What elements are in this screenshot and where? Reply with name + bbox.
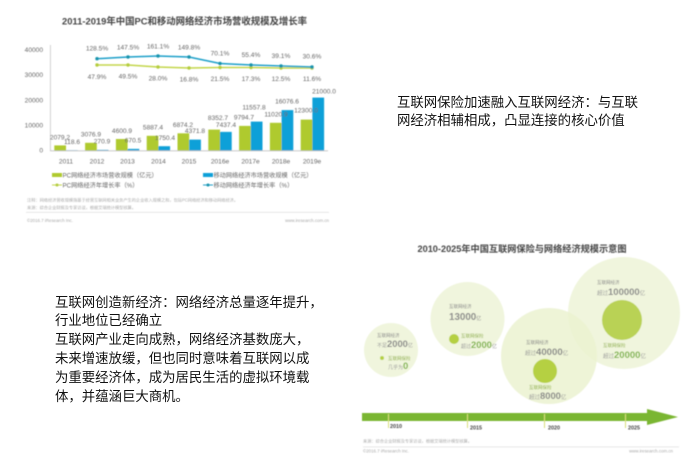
bar value labels: 1750.4 (155, 135, 175, 142)
text block: insurance and internet economy: 互联网保险加速融入互联网经济：与互联 (397, 95, 638, 110)
bubble: 2020: 互联网保险 (529, 384, 552, 391)
bubble: 2010: 不足2000亿 (377, 338, 413, 349)
text block: internet creates new economy: 行业地位已经确立 (55, 313, 162, 328)
x axis years: 2018e (272, 158, 290, 166)
timeline arrow: 2020 (548, 426, 560, 432)
x axis years: 2019e (303, 158, 321, 166)
x axis years (59, 158, 321, 166)
x axis years: 2017e (241, 158, 260, 166)
bar value labels: 11557.8 (242, 104, 266, 112)
growth rate labels: PC: 16.8% (180, 76, 198, 84)
x axis years: 2013 (120, 158, 135, 166)
bubble: 2025: 互联网经济 (597, 279, 620, 286)
bar value labels: 21000.0 (312, 88, 336, 96)
bubble chart note: 来源：综合企业财报及专家访谈，根据艾瑞统计模型核算。 (363, 438, 472, 444)
growth rate labels: mobile: 55.4% (242, 52, 260, 59)
bubble: 2020: 超过8000亿 (529, 390, 567, 401)
x axis years: 2014 (151, 158, 166, 166)
bar value labels: 16076.6 (275, 98, 299, 106)
y axis: 30000 (25, 72, 43, 79)
bubble: 2025 (568, 257, 680, 369)
growth rate labels: PC: 49.5% (119, 74, 137, 80)
bubble chart footer: www.iresearch.com.cn (629, 448, 674, 454)
y axis: 40000 (25, 47, 43, 54)
text block: insurance and internet economy: 网经济相辅相成，凸显连接的核心价值 (397, 113, 625, 128)
bar value labels (50, 88, 336, 146)
growth rate labels: PC (88, 74, 321, 84)
chart footer: ©2016.7 iResearch Inc. (27, 218, 73, 223)
bubble: 2015: 互联网保险 (461, 332, 484, 340)
x axis years: 2011 (59, 158, 73, 166)
bars: mobile revenue (66, 98, 324, 151)
legend: 移动网络经济年增长率（%） (214, 182, 293, 190)
text block: insurance and internet economy (397, 95, 638, 128)
text block: internet creates new economy: 体，并蕴涵巨大商机。 (55, 389, 189, 404)
bubble chart title: 2010-2025年中国互联网保险与网络经济规模示意图 (418, 243, 626, 254)
line: PC growth rate (95, 63, 314, 70)
bubble: 2010: 互联网保险 (388, 355, 411, 362)
bubble: 2025: 超过100000亿 (597, 287, 646, 298)
bar value labels: 3076.9 (81, 132, 101, 138)
text block: internet creates new economy: 互联网创造新经济：网络经济总量逐年提升， (55, 295, 323, 310)
bubble: 2025: 超过20000亿 (603, 350, 646, 361)
text block: internet creates new economy (55, 295, 323, 404)
growth rate labels: mobile: 30.6% (303, 54, 321, 60)
y axis: 0 (39, 148, 43, 154)
legend (52, 172, 312, 190)
bubble chart footer: ©2016.7 iResearch Inc. (363, 448, 409, 454)
panel: revenue chart (25, 16, 336, 223)
growth rate labels: mobile: 128.5% (86, 46, 108, 52)
growth rate labels: mobile: 147.5% (117, 44, 139, 52)
bubble: 2015: 13000亿 (449, 312, 481, 323)
chart footer: www.iresearch.com.cn (285, 218, 330, 223)
x axis years: 2016e (211, 158, 229, 166)
growth rate labels: mobile: 39.1% (272, 53, 290, 60)
timeline arrow (362, 409, 678, 432)
bar value labels: 6874.2 (173, 122, 193, 129)
growth rate labels: PC: 21.5% (211, 76, 229, 83)
timeline arrow: 2015 (470, 426, 482, 432)
bubble: 2015 (430, 282, 504, 356)
timeline arrow: 2025 (628, 426, 640, 432)
legend: PC网络经济年增长率（%） (62, 182, 138, 190)
chart notes (27, 196, 238, 211)
growth rate labels: PC: 28.0% (149, 76, 167, 82)
growth rate labels: PC: 11.6% (303, 76, 321, 83)
chart notes: 注释：网络经济营收规模指基于经营互联网相关业务产生的企业收入规模之和，包括PC网络经济和移动网络经济。 (27, 196, 238, 204)
bubble: 2020: 超过40000亿 (525, 347, 569, 358)
growth rate labels: mobile (86, 44, 321, 60)
y axis: 20000 (25, 98, 43, 104)
bar value labels: 4371.8 (185, 128, 205, 135)
bar value labels: 2079.2 (50, 134, 70, 142)
bars: PC revenue (54, 120, 312, 151)
bubble: 2020 (501, 308, 597, 404)
growth rate labels: mobile: 70.1% (211, 50, 229, 58)
text block: internet creates new economy: 互联网产业走向成熟，网络经济基数庞大， (55, 332, 309, 347)
growth rate labels: PC: 17.3% (242, 76, 260, 83)
bar value labels: 9794.7 (234, 114, 254, 122)
chart footer (27, 218, 330, 223)
y axis: 10000 (25, 122, 43, 130)
bar value labels: 270.9 (94, 138, 111, 146)
growth rate labels: PC: 47.9% (88, 74, 106, 81)
text block: internet creates new economy: 未来增速放缓，但也同时意味着互联网以成 (55, 351, 309, 366)
bubble chart footer (363, 448, 674, 454)
legend: 移动网络经济市场营收规模（亿元） (214, 172, 312, 180)
line: mobile growth rate (95, 54, 314, 69)
panel: bubble chart (362, 243, 680, 454)
timeline arrow: 2010 (390, 424, 402, 430)
growth rate labels: mobile: 149.8% (178, 44, 200, 52)
bar value labels: 8352.7 (208, 115, 228, 122)
bubble: 2010: 几乎为0 (388, 360, 408, 371)
x axis years: 2012 (90, 158, 105, 166)
bar value labels: 4600.9 (112, 128, 132, 135)
text block: internet creates new economy: 为重要经济体，成为居民生活的虚拟环境载 (55, 370, 309, 385)
bar value labels: 11020.9 (264, 112, 288, 118)
bar value labels: 5887.4 (143, 124, 163, 132)
bar value labels: 7437.4 (216, 122, 236, 129)
bubble: 2025: 互联网保险 (603, 342, 626, 349)
bubble: 2015: 互联网经济 (449, 303, 472, 310)
bubble: 2010: 互联网经济 (377, 332, 400, 339)
chart notes: 来源：综合企业财报及专家访谈，根据艾瑞统计模型核算。 (27, 204, 136, 211)
bar value labels: 12300.0 (294, 108, 318, 114)
bubble: 2020: 互联网经济 (526, 339, 549, 346)
bubble: 2015: 超过2000亿 (461, 339, 497, 350)
growth rate labels: PC: 12.5% (272, 76, 290, 83)
x axis years: 2015 (182, 158, 197, 166)
y axis (25, 45, 51, 154)
bar value labels: 670.5 (125, 138, 142, 144)
chart title: 2011-2019年中国PC和移动网络经济市场营收规模及增长率 (62, 16, 307, 26)
legend: PC网络经济市场营收规模（亿元） (62, 172, 158, 180)
bar value labels: 118.6 (64, 139, 80, 146)
growth rate labels: mobile: 161.1% (147, 44, 169, 50)
bubble: 2010 (364, 323, 418, 377)
